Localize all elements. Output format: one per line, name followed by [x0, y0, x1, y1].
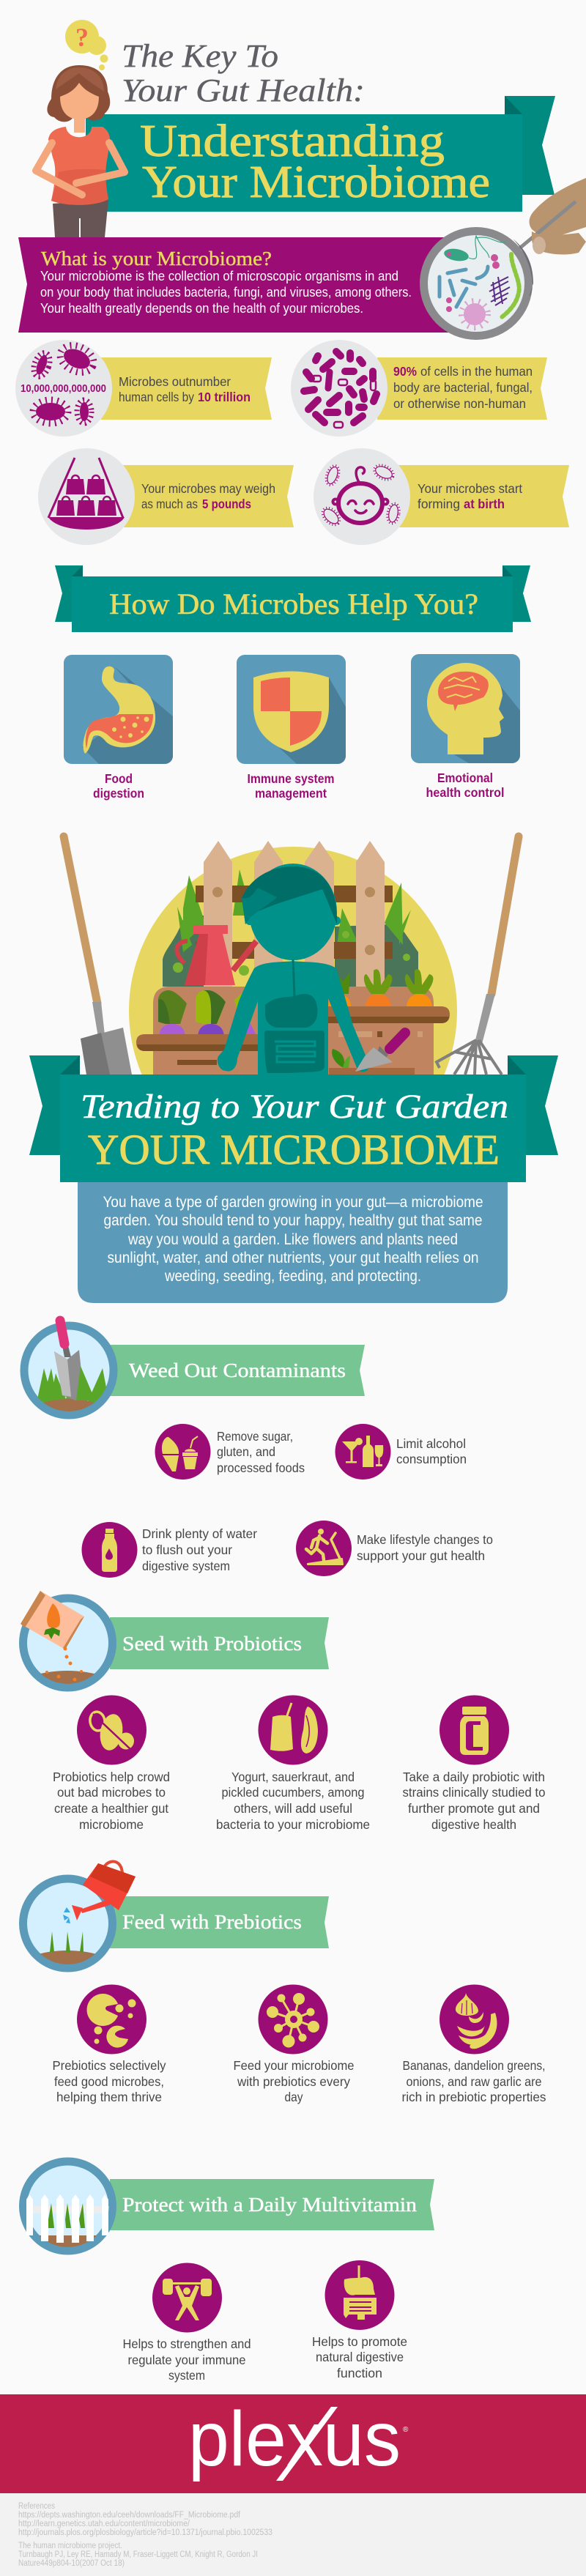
- icon: shield: [253, 671, 329, 752]
- footer: plexus logo band: [0, 2394, 586, 2493]
- item: probiotics crowd out: [53, 1695, 170, 1832]
- banner: Understanding Your Microbiome: [86, 96, 555, 212]
- text: Emotional health control: health control: [426, 785, 504, 800]
- item: limit alcohol: consumption: [396, 1452, 467, 1466]
- heading: Feed with Prebiotics: [110, 1896, 329, 1948]
- panel: gut garden intro: sunlight, water, and other nutrients, your gut health relies on: [107, 1250, 479, 1266]
- item: prebiotics selectively feed: feed good microbes,: [54, 2074, 164, 2089]
- text: Emotional health control: Emotional: [437, 771, 493, 785]
- panel: gut garden intro: [78, 1179, 508, 1303]
- icon: microbes eating: [87, 1994, 136, 2048]
- stat: microbes weigh 5 pounds: 5 pounds: [202, 497, 251, 511]
- icon: yogurt and pickle: [270, 1703, 318, 1753]
- text: Immune system management: Immune system: [248, 771, 334, 786]
- icon: weightlifter: [163, 2279, 212, 2320]
- icon: shovel: [64, 836, 132, 1074]
- icon: picket fence: [22, 2161, 114, 2254]
- item: prebiotics selectively feed: Prebiotics selectively: [53, 2058, 166, 2073]
- item: drink water: to flush out your: [142, 1543, 232, 1557]
- item: bananas and garlic: onions, and raw garlic are: [406, 2074, 542, 2089]
- item: limit alcohol: Limit alcohol: [396, 1436, 466, 1451]
- item: strengthen immune system: regulate your immune: [127, 2353, 246, 2367]
- item: feed your microbiome: Feed your microbiome: [233, 2058, 355, 2073]
- footer: references: References: [18, 2502, 55, 2511]
- icon: thought bubble with question mark: [65, 20, 108, 70]
- panel: gut garden intro: You have a type of garden growing in your gut—a microbiome: [103, 1194, 483, 1211]
- icon: stomach: [83, 667, 155, 754]
- footer: references: http://learn.genetics.utah.edu/content/microbiome/: [18, 2520, 190, 2528]
- item: yogurt and pickled foods: bacteria to your microbiome: [216, 1817, 370, 1832]
- icon: water bottle: [102, 1529, 117, 1572]
- item: probiotics crowd out: Probiotics help crowd: [53, 1770, 170, 1784]
- text: Food digestion: digestion: [93, 786, 144, 801]
- footer: references: The human microbiome project.: [18, 2542, 122, 2550]
- heading: Protect with a Daily Multivitamin: Protect with a Daily Multivitamin: [122, 2194, 418, 2216]
- icon: microbes: [31, 340, 98, 423]
- item: daily probiotic: Take a daily probiotic with: [403, 1770, 545, 1784]
- item: probiotics crowd out: create a healthier gut: [54, 1801, 168, 1816]
- item: daily probiotic: digestive health: [431, 1817, 516, 1832]
- banner: Tending to Your Gut Garden: Tending to Your Gut Garden: [81, 1088, 508, 1126]
- banner: Understanding Your Microbiome: Your Microbiome: [142, 157, 490, 207]
- card: Emotional health control: [411, 654, 520, 763]
- title: The Key To Your Gut Health: [122, 38, 365, 108]
- item: yogurt and pickled foods: pickled cucumbers, among: [221, 1785, 365, 1800]
- item: feed your microbiome: [233, 1985, 355, 2104]
- icon: pills: [89, 1710, 134, 1752]
- item: promote digestive function: [312, 2260, 407, 2380]
- item: promote digestive function: natural digestive: [316, 2350, 404, 2364]
- icon: molecule network: [267, 1993, 319, 2048]
- icon: bacteria: [304, 352, 377, 428]
- icon: garlic and bananas: [456, 1993, 497, 2049]
- item: prebiotics selectively feed: helping them thrive: [56, 2090, 162, 2104]
- banner: Understanding Your Microbiome: Understanding: [140, 116, 445, 166]
- item: daily probiotic: [403, 1695, 545, 1832]
- panel: What is your Microbiome: What is your Microbiome?: [41, 248, 272, 270]
- banner: Tending to Your Gut Garden: [29, 1055, 558, 1182]
- stat: microbes form at birth: [314, 448, 569, 545]
- item: remove sugar: processed foods: [217, 1460, 305, 1475]
- item: lifestyle changes: support your gut health: [357, 1548, 485, 1563]
- stat: 90% of cells: body are bacterial, fungal,: [393, 380, 533, 395]
- item: remove sugar: Remove sugar,: [217, 1429, 293, 1444]
- panel: What is your Microbiome: Your health greatly depends on the health of your microbes.: [40, 301, 363, 316]
- stat: 90% of cells: or otherwise non-human: [393, 396, 526, 411]
- stat: 10 trillion microbes: Microbes outnumber: [119, 374, 231, 389]
- item: yogurt and pickled foods: [216, 1695, 370, 1832]
- banner: How Do Microbes Help You: [55, 565, 531, 632]
- icon: supplement jar: [460, 1707, 489, 1755]
- organs: [264, 959, 324, 1073]
- title: The Key To Your Gut Health: The Key To: [122, 38, 278, 74]
- icon: shovel in soil: [24, 1321, 114, 1428]
- icon: trowel and sprout: [332, 1033, 405, 1072]
- item: strengthen immune system: Helps to strengthen and: [123, 2336, 251, 2351]
- illustration: gut garden: [60, 832, 523, 1074]
- planter box: [153, 987, 434, 1074]
- item: remove sugar: gluten, and: [217, 1444, 275, 1459]
- stat: 10 trillion microbes: 10,000,000,000,000: [21, 383, 106, 395]
- icon: rake: [437, 836, 519, 1074]
- panel: gut garden intro: way you would a garden. Like flowers and plants need: [127, 1231, 458, 1248]
- panel: gut garden intro: garden. You should tend to your happy, healthy gut that same: [104, 1212, 482, 1229]
- stat: microbes weigh 5 pounds: Your microbes may weigh: [141, 481, 275, 496]
- item: bananas and garlic: rich in prebiotic properties: [401, 2090, 546, 2104]
- footer: references: Nature449p804-10(2007 Oct 18): [18, 2559, 125, 2568]
- item: limit alcohol: [335, 1424, 467, 1480]
- item: probiotics crowd out: microbiome: [79, 1817, 144, 1832]
- heading: Feed with Prebiotics: Feed with Prebiotics: [122, 1911, 302, 1933]
- icon: head with brain: [427, 663, 504, 754]
- stat: 10 trillion microbes: 10 trillion: [198, 390, 251, 404]
- item: yogurt and pickled foods: others, will add useful: [234, 1801, 352, 1816]
- panel: What is your Microbiome: [18, 237, 469, 333]
- item: bananas and garlic: Bananas, dandelion greens,: [403, 2058, 545, 2073]
- icon: hand holding magnifying glass over microbes: [420, 178, 586, 340]
- text: Food digestion: Food: [105, 771, 133, 786]
- footer: references: Turnbaugh PJ, Ley RE, Hamady M, Fraser-Liggett CM, Knight R, Gordon JI: [18, 2550, 258, 2559]
- heading: Seed with Probiotics: [110, 1617, 329, 1669]
- footer: references: http://journals.plos.org/plosbiology/article?id=10.1371/journal.pbio.1002533: [18, 2528, 272, 2537]
- item: feed your microbiome: with prebiotics every: [237, 2074, 350, 2089]
- icon: thought bubble with question mark: ?: [75, 23, 89, 52]
- title: The Key To Your Gut Health: Your Gut Health:: [122, 73, 365, 108]
- shelves: [136, 1006, 450, 1051]
- icon: ice cream and drink: [162, 1436, 198, 1471]
- icon: watering can over sprouts: [19, 1860, 136, 1972]
- stat: microbes form at birth: forming: [418, 497, 460, 511]
- bushes and grass: [163, 869, 418, 987]
- item: lifestyle changes: [296, 1521, 493, 1576]
- item: daily probiotic: further promote gut and: [408, 1801, 540, 1816]
- item: promote digestive function: Helps to promote: [312, 2334, 407, 2349]
- stat: microbes weigh 5 pounds: [38, 448, 294, 545]
- stat: 90% of cells: 90%: [393, 364, 417, 379]
- text: Immune system management: management: [255, 786, 327, 801]
- footer: references: [0, 2493, 586, 2576]
- icon: baby with microbes: [319, 462, 401, 528]
- stat: 10 trillion microbes: human cells by: [119, 390, 194, 404]
- item: drink water: digestive system: [142, 1559, 230, 1573]
- stat: microbes weigh 5 pounds: as much as: [141, 497, 198, 511]
- vegetables: turnips: [158, 990, 258, 1038]
- heading: Protect with a Daily Multivitamin: [110, 2179, 434, 2230]
- stat: microbes form at birth: Your microbes start: [418, 481, 522, 496]
- footer: plexus logo band: plexus: [188, 2396, 401, 2482]
- item: prebiotics selectively feed: [53, 1985, 166, 2104]
- footer: plexus logo band: ®: [403, 2426, 409, 2434]
- icon: seed packet: [19, 1591, 116, 1692]
- stat: 90% of cells: of cells in the human: [420, 364, 533, 379]
- card: Food digestion: [64, 655, 173, 764]
- item: yogurt and pickled foods: Yogurt, sauerkraut, and: [231, 1770, 355, 1784]
- text: Emotional health control: [426, 771, 504, 800]
- banner: How Do Microbes Help You: How Do Microbes Help You?: [109, 587, 478, 620]
- heading: Seed with Probiotics: Seed with Probiotics: [122, 1633, 302, 1655]
- panel: What is your Microbiome: Your microbiome is the collection of microscopic organisms in and: [40, 269, 398, 283]
- fence: [196, 841, 393, 987]
- card: Immune system management: [237, 655, 346, 764]
- item: lifestyle changes: Make lifestyle changes to: [357, 1532, 493, 1547]
- item: strengthen immune system: system: [168, 2368, 205, 2383]
- text: Immune system management: [248, 771, 334, 801]
- item: probiotics crowd out: out bad microbes to: [57, 1785, 166, 1800]
- stat: microbes form at birth: at birth: [464, 497, 505, 511]
- panel: gut garden intro: weeding, seeding, feeding, and protecting.: [164, 1268, 421, 1285]
- illustration: woman holding stomach: [36, 65, 125, 237]
- heading: Weed Out Contaminants: [110, 1345, 365, 1396]
- item: drink water: [82, 1522, 257, 1578]
- figure: person with visible gut: [218, 864, 370, 1074]
- item: feed your microbiome: day: [284, 2090, 303, 2104]
- icon: watering can: [177, 925, 256, 985]
- item: drink water: Drink plenty of water: [142, 1526, 257, 1541]
- heading: Weed Out Contaminants: Weed Out Contaminants: [129, 1359, 346, 1381]
- icon: scale with weights: [48, 458, 125, 530]
- text: Food digestion: [93, 771, 144, 801]
- icon: digestive system: [344, 2265, 377, 2320]
- banner: Tending to Your Gut Garden: YOUR MICROBIOME: [88, 1126, 500, 1173]
- icon: treadmill runner: [306, 1529, 343, 1564]
- item: bananas and garlic: [401, 1985, 546, 2104]
- vegetables: carrots: [328, 969, 434, 1006]
- item: remove sugar: [155, 1424, 305, 1480]
- icon: alcohol drinks: [342, 1436, 383, 1467]
- stat: 90% of cells: [291, 340, 547, 437]
- stat: 10 trillion microbes: [15, 340, 272, 437]
- panel: What is your Microbiome: on your body that includes bacteria, fungi, and viruses, among others.: [40, 285, 412, 300]
- item: promote digestive function: function: [337, 2366, 382, 2380]
- item: daily probiotic: strains clinically studied to: [403, 1785, 545, 1800]
- item: strengthen immune system: [123, 2263, 251, 2383]
- footer: references: https://depts.washington.edu/ceeh/downloads/FF_Microbiome.pdf: [18, 2511, 241, 2520]
